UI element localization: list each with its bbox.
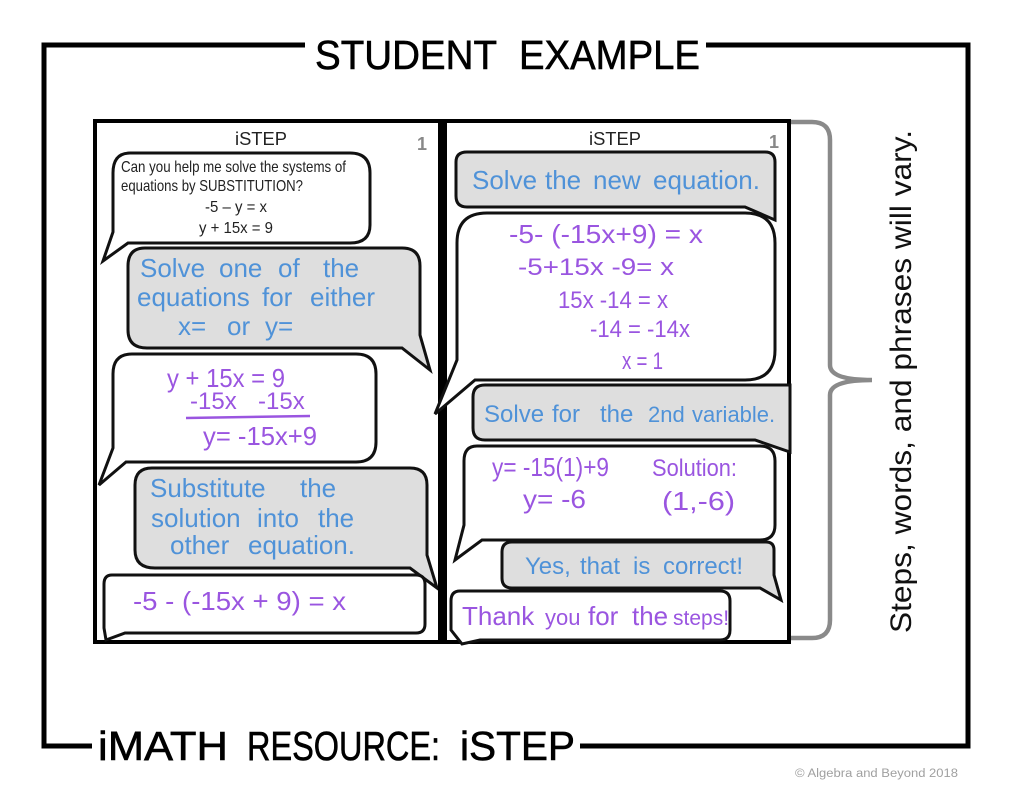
left panel heading: iSTEP <box>235 128 287 149</box>
bubble: solve one <box>128 248 430 370</box>
title <box>315 32 700 78</box>
bubble: solve one: y= <box>265 311 293 341</box>
bubble: substitute: the <box>300 473 336 503</box>
bubble: second variable: 2nd <box>648 402 685 427</box>
bubble: isolate y: y= -15x+9 <box>203 421 317 451</box>
bubble: thank you: you <box>545 605 580 630</box>
bubble: question: Can you help me solve the systems of <box>121 159 346 176</box>
bubble: second variable: Solve <box>484 401 544 428</box>
bubble: isolate y: -15x <box>258 388 305 415</box>
bubble: question: -5 – y = x <box>205 199 267 216</box>
side note: Steps, words, and phrases will vary. <box>885 130 918 633</box>
bubble: correct: correct! <box>663 553 743 580</box>
bubble: thank you: steps! <box>673 607 729 630</box>
copyright: © Algebra and Beyond 2018 <box>795 768 958 780</box>
bubble: thank you: for <box>588 601 619 631</box>
bubble: solve one: Solve <box>140 253 205 283</box>
bubble: solving steps: -5- (-15x+9) = x <box>509 219 703 249</box>
bubble: solve new equation: equation. <box>653 165 760 195</box>
bubble: solution <box>455 446 775 560</box>
bubble: solve one: the <box>323 253 359 283</box>
bubble: solve one: one <box>219 253 262 283</box>
bubble: solve one: either <box>310 282 375 312</box>
bubble: solving steps: -14 = -14x <box>590 316 690 343</box>
footer heading <box>98 723 575 769</box>
bubble: isolate y: y + 15x = 9 <box>167 363 285 393</box>
panel: right worksheet <box>435 121 790 644</box>
bubble: correct: Yes, <box>525 553 571 580</box>
bubble: solving steps: x = 1 <box>622 348 663 375</box>
bubble: substitute: the <box>318 503 354 533</box>
bubble: question: y + 15x = 9 <box>199 220 273 237</box>
bubble: question <box>103 153 370 261</box>
bubble: substitute: solution <box>151 503 241 533</box>
bubble: second variable <box>473 385 790 452</box>
bubble: solve new equation: Solve <box>472 165 537 195</box>
bubble: correct: is <box>633 553 650 580</box>
bubble: substitute: Substitute <box>150 473 266 503</box>
bubble: thank you: the <box>632 601 668 631</box>
footer heading: iMATH <box>98 723 228 769</box>
bubble: solve one: x= <box>178 311 206 341</box>
bubble: question: equations by SUBSTITUTION? <box>121 178 303 195</box>
footer heading: RESOURCE: <box>247 723 440 769</box>
bubble: correct <box>502 542 781 600</box>
bubble: isolate y: -15x <box>190 388 237 415</box>
bubble: second variable: variable. <box>692 402 775 427</box>
bracket <box>789 122 872 638</box>
bubble: solve one: or <box>227 311 250 341</box>
bubble: solution: (1,-6) <box>662 486 735 516</box>
bubble: substituted equation <box>104 575 425 640</box>
bubble: substitute <box>135 468 437 588</box>
bubble: thank you: Thank <box>462 601 535 631</box>
bubble: solving steps: -5+15x -9= x <box>518 254 674 281</box>
title: EXAMPLE <box>519 32 700 78</box>
title: STUDENT <box>315 32 497 78</box>
bubble: solve one: of <box>278 253 300 283</box>
footer heading: iSTEP <box>460 723 575 769</box>
right page number: 1 <box>769 132 779 152</box>
bubble: substitute: other <box>170 530 230 560</box>
bubble: solve one: equations <box>137 282 250 312</box>
bubble: substitute: into <box>257 503 299 533</box>
bubble: solve new equation: new <box>593 165 641 195</box>
bubble: solution: y= -15(1)+9 <box>492 452 609 482</box>
center divider <box>438 121 447 642</box>
bubble: solving steps: 15x -14 = x <box>558 287 668 314</box>
bubble: solving steps <box>435 213 775 414</box>
left page number: 1 <box>417 134 427 154</box>
bubble: isolate y <box>99 354 376 485</box>
bubble: substituted equation: -5 - (-15x + 9) = x <box>133 586 346 616</box>
bubble: solve one: for <box>262 282 293 312</box>
bubble: solve new equation <box>456 152 775 220</box>
bubble: thank you <box>451 591 730 644</box>
bubble: second variable: the <box>600 401 633 428</box>
bubble: solve new equation: the <box>545 165 581 195</box>
bubble: solution: Solution: <box>652 455 737 482</box>
bubble: substitute: equation. <box>248 530 355 560</box>
right panel heading: iSTEP <box>589 128 641 149</box>
panel: left worksheet <box>95 121 442 642</box>
bubble: second variable: for <box>552 401 580 428</box>
bubble: correct: that <box>580 553 620 580</box>
bubble: solution: y= -6 <box>523 484 586 514</box>
